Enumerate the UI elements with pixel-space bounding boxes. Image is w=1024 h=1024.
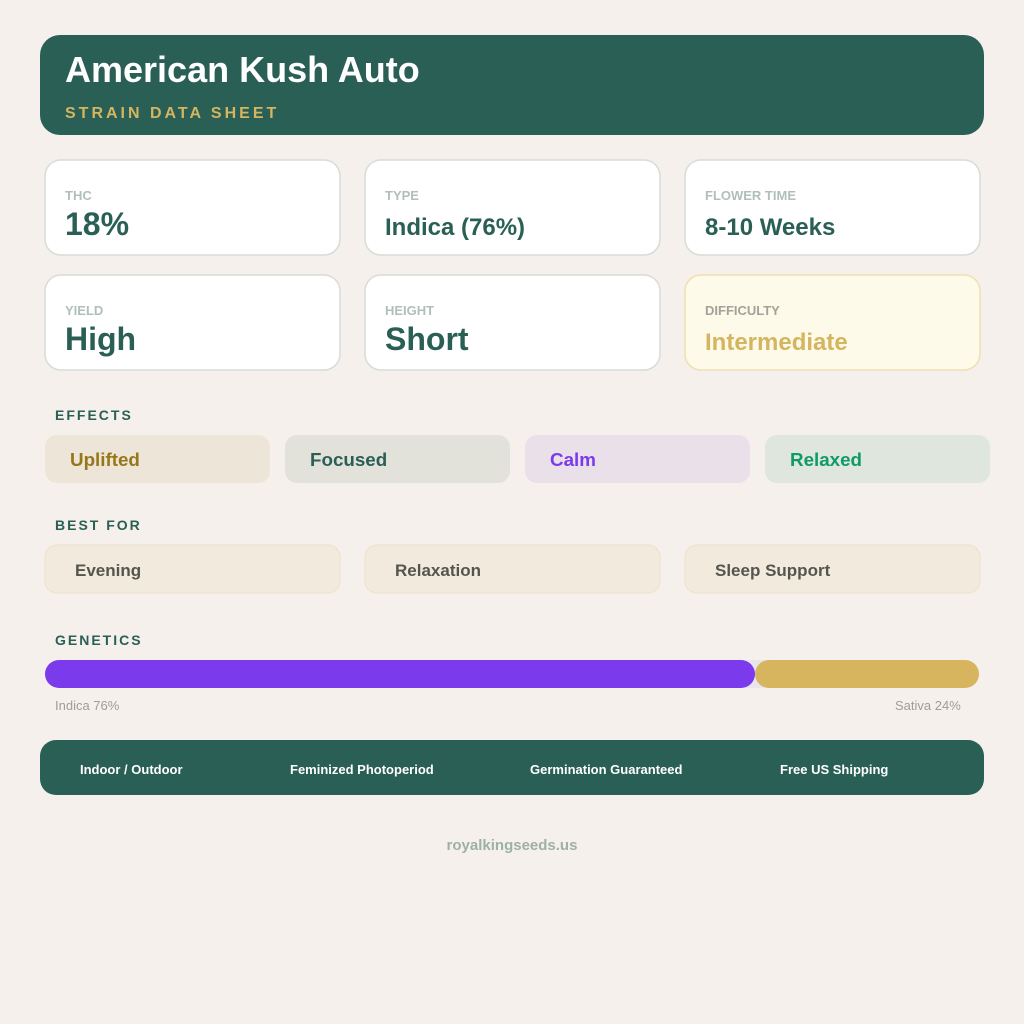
effect tag: calm: Calm [550,449,596,470]
best for: relaxation [365,545,660,593]
best for: relaxation: Relaxation [395,561,481,580]
genetics bar [45,660,979,688]
stat card: difficulty: Intermediate [705,329,848,356]
section heading: genetics: GENETICS [55,632,143,648]
stat card: difficulty [685,275,980,370]
effect tag: uplifted [45,435,270,483]
stat card: yield: YIELD [65,303,103,318]
sativa segment [755,660,979,688]
stat card: type: TYPE [385,188,419,203]
effect tag: relaxed: Relaxed [790,449,862,470]
stat card: flower time: 8-10 Weeks [705,214,835,241]
feature footer bar: Indoor / Outdoor [80,762,183,777]
stat card: yield: High [65,321,136,357]
title: American Kush Auto [65,49,420,90]
feature footer bar: Feminized Photoperiod [290,762,434,777]
sativa label: Sativa 24% [895,698,961,713]
stat card: flower time [685,160,980,255]
stat card: flower time: FLOWER TIME [705,188,796,203]
header banner [40,35,984,135]
feature footer bar: Free US Shipping [780,762,888,777]
stat card: yield [45,275,340,370]
section heading: effects: EFFECTS [55,407,133,423]
stat card: type [365,160,660,255]
stat card: type: Indica (76%) [385,214,525,241]
section heading: best for: BEST FOR [55,517,142,533]
website: royalkingseeds.us [447,837,577,854]
effect tag: focused [285,435,510,483]
stat card: height [365,275,660,370]
stat card: THC [45,160,340,255]
indica segment [45,660,755,688]
stat card: THC: 18% [65,206,129,242]
stat card: THC: THC [65,188,92,203]
best for: evening [45,545,340,593]
effect tag: calm [525,435,750,483]
feature footer bar: Germination Guaranteed [530,762,682,777]
effect tag: uplifted: Uplifted [70,449,140,470]
indica label: Indica 76% [55,698,120,713]
effect tag: focused: Focused [310,449,387,470]
stat card: difficulty: DIFFICULTY [705,303,780,318]
effect tag: relaxed [765,435,990,483]
best for: sleep support [685,545,980,593]
feature footer bar [40,740,984,795]
best for: sleep support: Sleep Support [715,561,831,580]
stat card: height: Short [385,321,469,357]
best for: evening: Evening [75,561,141,580]
subtitle: STRAIN DATA SHEET [65,105,279,122]
stat card: height: HEIGHT [385,303,434,318]
